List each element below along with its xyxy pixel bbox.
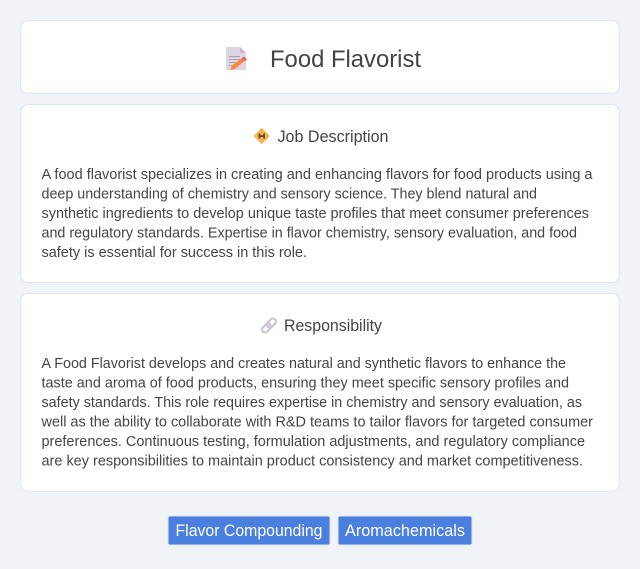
- icon: document with pencil: [226, 47, 247, 70]
- panel: responsibility: [20, 294, 620, 492]
- icon: diamond sign: [254, 128, 269, 144]
- tag: flavor compounding: [168, 516, 330, 545]
- heading: job description: Job Description: [278, 128, 388, 146]
- text block: responsibility: preferences. Continuous testing, formulation adjustments, and regulatory compliance: [42, 434, 585, 450]
- text block: job description: deep understanding of chemistry and sensory science. They blend natural and: [42, 186, 537, 202]
- tag: flavor compounding: Flavor Compounding: [176, 522, 322, 540]
- text block: responsibility: safety standards. This role requires expertise in chemistry and sensory evaluation, as: [42, 395, 582, 411]
- text block: responsibility: [40, 356, 593, 470]
- text block: job description: A food flavorist specializes in creating and enhancing flavors for food products using a: [42, 167, 592, 183]
- text block: job description: and regulatory standards. Expertise in flavor chemistry, sensory evaluation, and food: [42, 226, 577, 242]
- panel: job description: [20, 104, 620, 282]
- title: Food Flavorist: [270, 46, 421, 73]
- text block: responsibility: well as the ability to collaborate with R&D teams to tailor flavors for targeted consumer: [40, 414, 593, 430]
- panel: title card: [20, 20, 620, 94]
- text block: responsibility: taste and aroma of food products, ensuring they meet specific sensory profiles and: [42, 376, 569, 392]
- tag: aromachemicals: [338, 516, 472, 545]
- text block: responsibility: A Food Flavorist develops and creates natural and synthetic flavors to enhance the: [42, 356, 566, 372]
- icon: chain link: [261, 317, 277, 334]
- text block: job description: synthetic ingredients to develop unique taste profiles that meet consumer preferences: [42, 206, 589, 222]
- text block: job description: safety is essential for success in this role.: [42, 245, 307, 261]
- tag: aromachemicals: Aromachemicals: [345, 522, 465, 540]
- text block: job description: [42, 167, 592, 261]
- heading: responsibility: Responsibility: [284, 317, 383, 335]
- text block: responsibility: are key responsibilities to maintain product consistency and market competitiveness.: [42, 454, 583, 470]
